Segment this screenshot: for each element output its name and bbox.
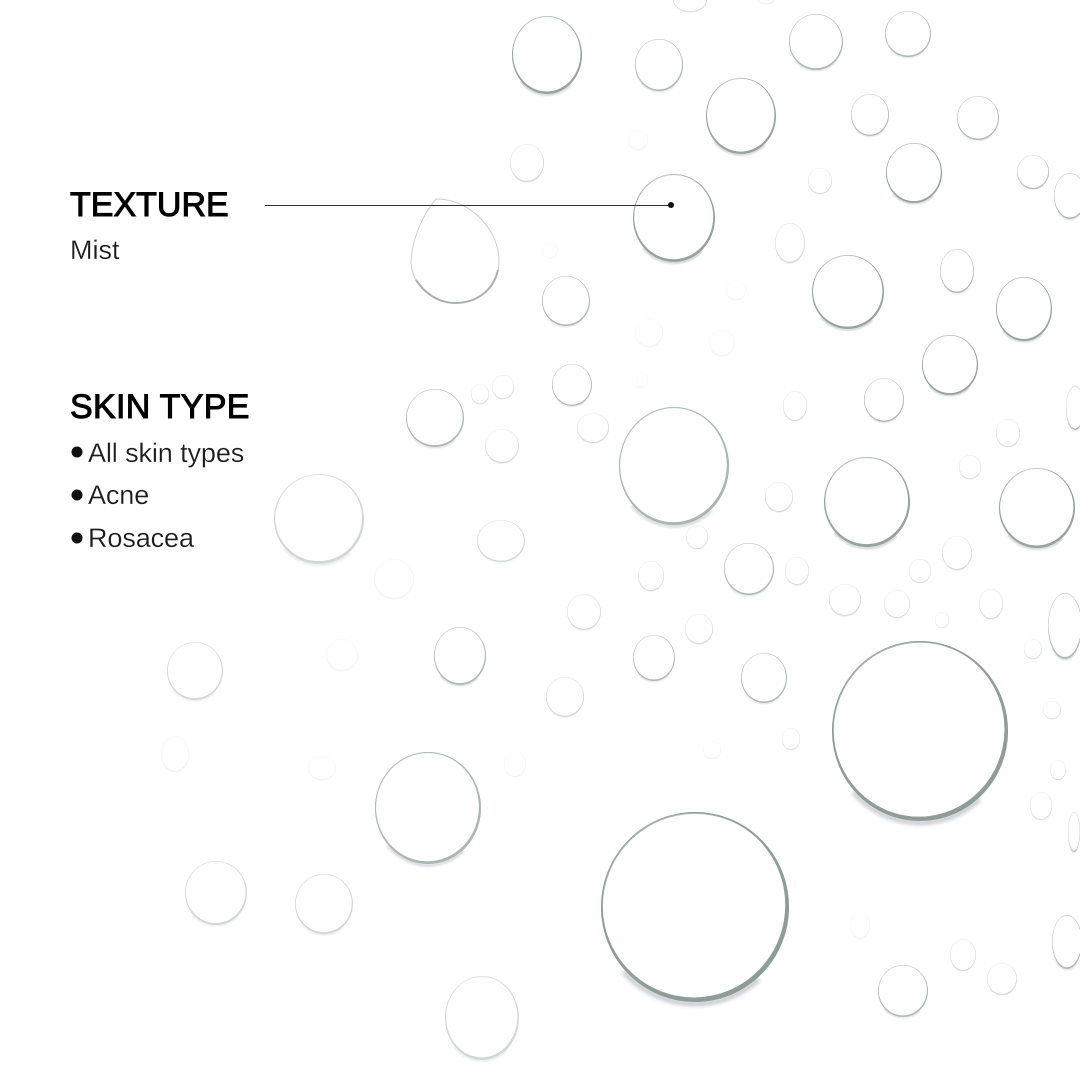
droplet: teardrop	[411, 199, 499, 303]
heading: skin type: SKIN TYPE	[70, 388, 250, 426]
droplets: large	[375, 407, 1008, 1004]
list item: all skin types: All skin types	[88, 438, 244, 468]
leader line: texture to droplet	[265, 202, 674, 208]
list: skin types	[72, 438, 244, 553]
list item: rosacea: Rosacea	[88, 523, 195, 553]
droplets: medium	[406, 11, 1080, 1018]
list item: acne: Acne	[88, 480, 149, 510]
heading: texture: TEXTURE	[70, 186, 229, 224]
text: mist: Mist	[70, 235, 120, 265]
